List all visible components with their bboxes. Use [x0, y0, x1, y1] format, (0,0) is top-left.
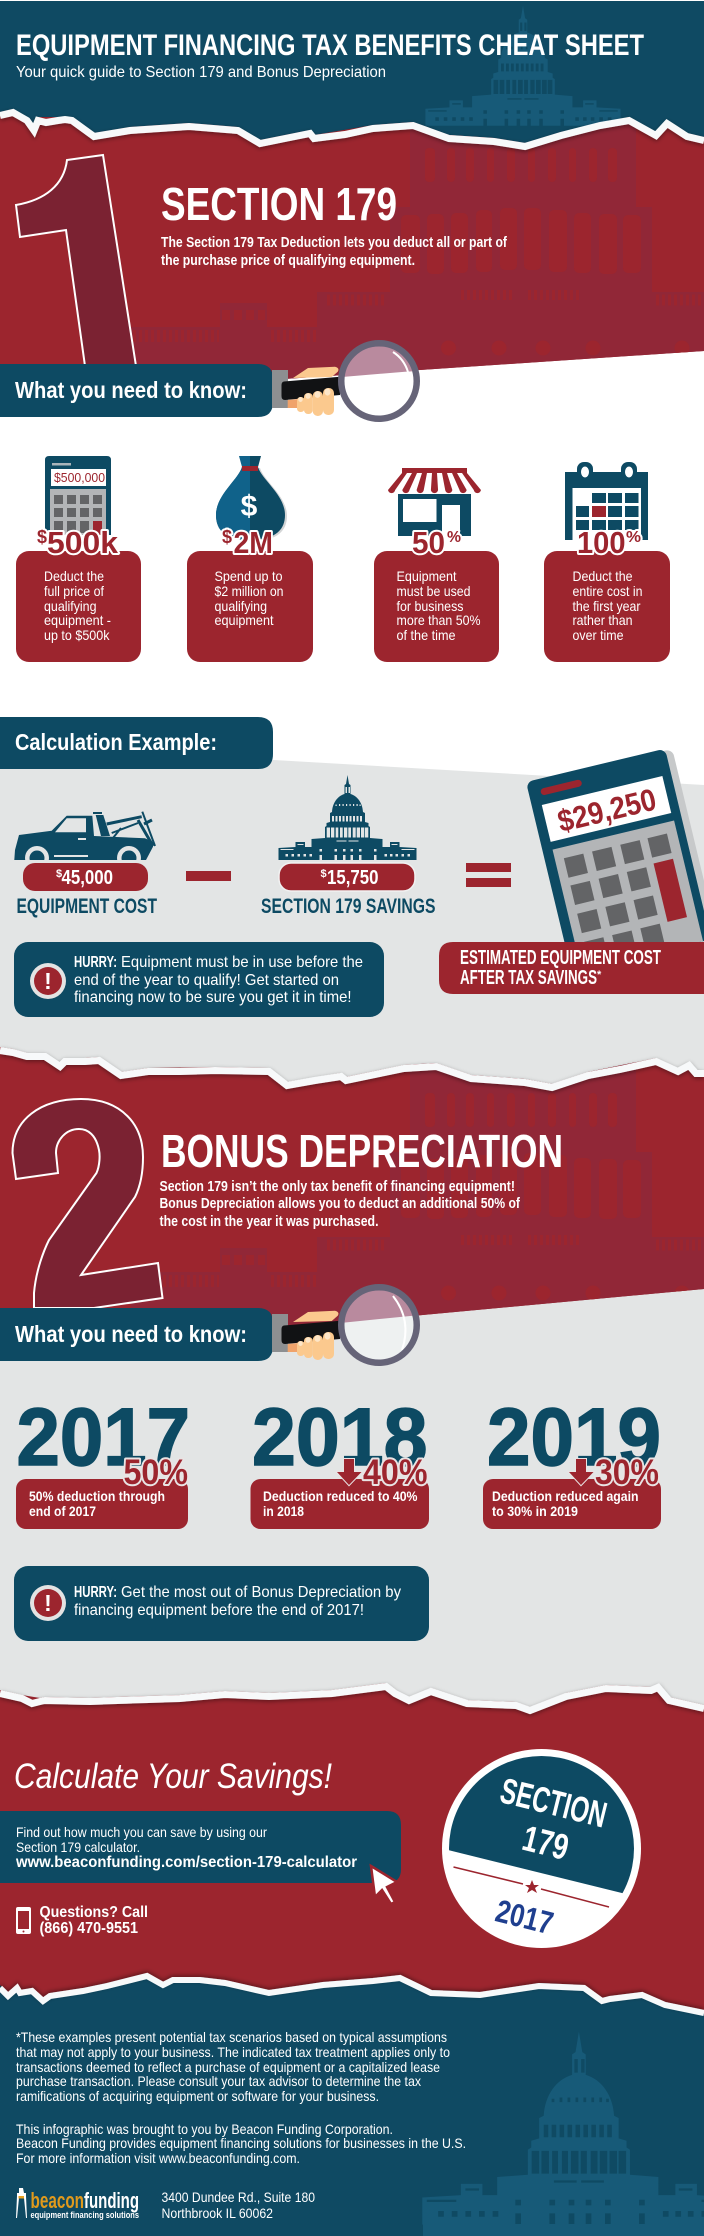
stat card: 50%: more than 50%: [396, 612, 480, 628]
icon: exclamation: !: [44, 1590, 52, 1616]
badge: section 179 2017: [440, 1740, 641, 1948]
watermark: capitol in section 2: [131, 1062, 704, 1325]
stat card: $2M: Spend up to: [214, 568, 283, 584]
stat card: 100%: Deduct the: [572, 568, 633, 584]
panel: calculate your savings: [0, 1683, 704, 2015]
stat card: $2M: [187, 456, 313, 662]
section 179 savings amount pill: [279, 863, 415, 891]
grey background: calculation area: [0, 744, 704, 1730]
callout: hurry note 2: financing equipment before the end of 2017!: [74, 1602, 364, 1619]
icon: exclamation: [30, 1585, 66, 1621]
icon: phone: [16, 1907, 31, 1934]
year card: 2017: 50%: [124, 1453, 188, 1492]
icon: down arrow: [569, 1459, 594, 1485]
callout: hurry note 2: Get the most out of Bonus Depreciation by: [121, 1584, 401, 1601]
stat card: $2M: equipment: [214, 612, 274, 628]
numeral 2: [12, 1099, 162, 1308]
badge: section 179 2017: 179: [518, 1817, 573, 1868]
text: address: Northbrook IL 60062: [162, 2205, 273, 2221]
text: section 179 description: [161, 234, 508, 269]
calculator link box: [0, 1811, 401, 1883]
torn paper edge: [0, 1976, 704, 2013]
panel: section 1 stat cards: [16, 456, 670, 662]
heading: section 179: SECTION 179: [161, 178, 397, 230]
heading: bonus depreciation: BONUS DEPRECIATION: [161, 1125, 563, 1177]
callout: hurry note 2: [14, 1566, 429, 1641]
logo: beacon funding: funding: [84, 2188, 139, 2213]
torn paper edge: [0, 1050, 704, 1088]
icon: calculator: [45, 456, 111, 535]
text: questions call: Questions? Call: [40, 1904, 148, 1921]
year card: 2017: end of 2017: [29, 1503, 96, 1519]
stat card: 100%: 100: [577, 525, 626, 560]
year card: 2019: 30%: [595, 1453, 659, 1492]
callout: hurry note 1: HURRY:: [74, 954, 117, 971]
icon: money bag: [216, 456, 287, 541]
stat card: $500k: 500k: [47, 525, 119, 560]
stat card: 50%: 50: [412, 525, 445, 560]
icon: calculator: $500,000: [54, 470, 105, 485]
text: disclaimer: *These examples present potential tax scenarios based on typical assumptions: [16, 2029, 447, 2045]
text: disclaimer: purchase transaction. Please consult your tax advisor to determine the tax: [16, 2073, 421, 2089]
icon: hand with magnifying glass (section 2): [272, 1280, 420, 1363]
equipment cost amount pill: [23, 863, 148, 891]
stat card: $2M: qualifying: [214, 598, 267, 614]
equipment cost amount pill: $: [56, 868, 62, 880]
panel: calculation example: [0, 717, 704, 1017]
stat card: 50%: Equipment: [396, 568, 457, 584]
heading bar: what you need to know (section 1): [0, 364, 273, 417]
badge: section 179 2017: SECTION: [496, 1770, 611, 1835]
icon: tilted calculator with result: $29,250: [554, 782, 660, 839]
text: questions call: (866) 470-9551: [40, 1920, 138, 1937]
result banner: estimated equipment cost: AFTER TAX SAVINGS: [460, 967, 597, 989]
equipment cost amount pill: 45,000: [62, 867, 113, 889]
stat card: 100%: [544, 462, 670, 662]
year card: 2018: Deduction reduced to 40%: [263, 1488, 418, 1504]
text: section 179 description: The Section 179 Tax Deduction lets you deduct all or part of: [161, 234, 508, 251]
panel: section 1 hero: [0, 108, 704, 379]
text: address: 3400 Dundee Rd., Suite 180: [162, 2189, 315, 2205]
stat card: 100%: over time: [572, 627, 624, 643]
year card: 2018: in 2018: [263, 1503, 304, 1519]
torn paper edge: [0, 112, 704, 146]
label: equipment cost: EQUIPMENT COST: [16, 895, 157, 918]
text: about beacon funding: [16, 2121, 466, 2166]
heading bar: what you need to know (section 2): [0, 1308, 273, 1361]
heading bar: calculation example: Calculation Example:: [15, 729, 217, 755]
text: disclaimer: [16, 2029, 450, 2104]
calculator link box: Find out how much you can save by using our: [16, 1824, 267, 1840]
result banner: estimated equipment cost: [439, 942, 704, 994]
callout: hurry note 1: end of the year to qualify! Get started on: [74, 972, 339, 989]
stat card: $500k: Deduct the: [44, 568, 104, 584]
year card: 2018: 2018: [252, 1392, 428, 1483]
stat card: 100%: entire cost in: [572, 583, 642, 599]
icon: exclamation: !: [44, 968, 52, 994]
badge: section 179 2017: 2017: [492, 1893, 557, 1941]
callout: hurry note 1: Equipment must be in use before the: [121, 954, 363, 971]
icon: tilted calculator with result: [526, 747, 704, 975]
logo: beacon funding: beacon: [30, 2188, 84, 2213]
stat card: 100%: %: [626, 529, 641, 546]
heading: calculate your savings: Calculate Your Savings!: [14, 1757, 332, 1796]
year card: 2019: to 30% in 2019: [492, 1503, 578, 1519]
text: bonus depreciation description: Bonus Depreciation allows you to deduct an additional 50% of: [160, 1195, 521, 1212]
calculator link box: Section 179 calculator.: [16, 1839, 140, 1855]
stat card: $500k: [16, 456, 141, 662]
stat card: 100%: rather than: [572, 612, 632, 628]
text: disclaimer: transactions deemed to reflect a purchase of equipment or a capitalized lease: [16, 2059, 440, 2075]
stat card: $2M: $: [222, 527, 232, 547]
logo: beacon funding: equipment financing solutions: [30, 2210, 139, 2221]
icon: minus sign: [186, 871, 231, 881]
panel: section 2 hero: [0, 1046, 704, 1326]
year card: 2019: [483, 1392, 661, 1529]
stat card: 50%: must be used: [396, 583, 470, 599]
callout: hurry note 2: HURRY:: [74, 1584, 117, 1601]
text: disclaimer: that may not apply to your business. The indicated tax treatment applies only to: [16, 2044, 450, 2060]
stat card: $2M: $2 million on: [214, 583, 284, 599]
panel: year schedule: [14, 1392, 661, 1641]
subtitle: Your quick guide to Section 179 and Bonus Depreciation: [16, 64, 386, 81]
text: disclaimer: ramifications of acquiring equipment or software for your business.: [16, 2088, 379, 2104]
text: about beacon funding: This infographic was brought to you by Beacon Funding Corporation.: [16, 2121, 393, 2137]
stat card: 50%: %: [447, 529, 461, 546]
calculator link box: www.beaconfunding.com/section-179-calculator: [15, 1854, 357, 1871]
year card: 2017: [16, 1392, 190, 1529]
text: bonus depreciation description: Section 179 isn’t the only tax benefit of financing equipment!: [160, 1178, 515, 1195]
stat card: 50%: [374, 468, 499, 662]
icon: capitol building: [278, 775, 416, 860]
year card: 2017: 2017: [16, 1392, 190, 1483]
icon: money bag: $: [241, 490, 258, 523]
stat card: $500k: full price of: [44, 583, 104, 599]
stat card: $2M: 2M: [234, 525, 273, 560]
text: about beacon funding: For more information visit www.beaconfunding.com.: [16, 2150, 300, 2166]
icon: down arrow: [337, 1459, 362, 1485]
icon: store: [388, 468, 481, 536]
year card: 2019: 2019: [487, 1392, 661, 1483]
heading bar: what you need to know (section 1): What you need to know:: [15, 377, 247, 403]
logo: beacon funding: [16, 2188, 139, 2221]
text: bonus depreciation description: [160, 1178, 521, 1230]
result banner: estimated equipment cost: *: [597, 969, 602, 981]
torn paper edge: [0, 1686, 704, 1710]
section 179 savings amount pill: 15,750: [327, 867, 378, 889]
watermark: capitol in header: [425, 6, 621, 126]
callout: hurry note 1: financing now to be sure you get it in time!: [74, 989, 352, 1006]
heading bar: calculation example: [0, 717, 273, 769]
icon: calendar: [565, 462, 648, 540]
watermark: capitol in section 1: [131, 117, 704, 379]
numeral 1: [16, 155, 136, 366]
icon: exclamation: [30, 963, 66, 999]
icon: hand with magnifying glass (section 1): [272, 335, 420, 419]
stat card: 50%: for business: [396, 598, 464, 614]
panel: footer: [0, 1973, 704, 2236]
stat card: 100%: the first year: [572, 598, 641, 614]
stat card: $500k: qualifying: [44, 598, 96, 614]
icon: tow truck: [14, 812, 155, 870]
stat card: $500k: up to $500k: [44, 627, 110, 643]
section 179 savings amount pill: $: [320, 868, 327, 880]
icon: cursor arrow: [371, 1866, 397, 1904]
stat card: $500k: $: [37, 527, 47, 547]
text: questions call: [40, 1904, 148, 1937]
year card: 2019: Deduction reduced again: [492, 1488, 638, 1504]
text: address: [162, 2189, 315, 2221]
text: section 179 description: the purchase price of qualifying equipment.: [161, 252, 415, 269]
watermark: capitol in footer: [422, 2032, 704, 2236]
year card: 2018: 40%: [363, 1453, 428, 1492]
heading bar: what you need to know (section 2): What you need to know:: [15, 1321, 247, 1347]
year card: 2017: 50% deduction through: [29, 1488, 165, 1504]
stat card: 50%: of the time: [396, 627, 456, 643]
text: bonus depreciation description: the cost in the year it was purchased.: [160, 1213, 378, 1230]
year card: 2018: [250, 1392, 429, 1529]
callout: hurry note 1: [14, 942, 384, 1017]
label: section 179 savings: SECTION 179 SAVINGS: [261, 895, 436, 918]
panel: header: [0, 1, 704, 171]
stat card: $500k: equipment -: [44, 612, 111, 628]
text: about beacon funding: Beacon Funding provides equipment financing solutions for businesses in the U.S.: [16, 2135, 466, 2151]
icon: equals sign: [466, 863, 511, 887]
